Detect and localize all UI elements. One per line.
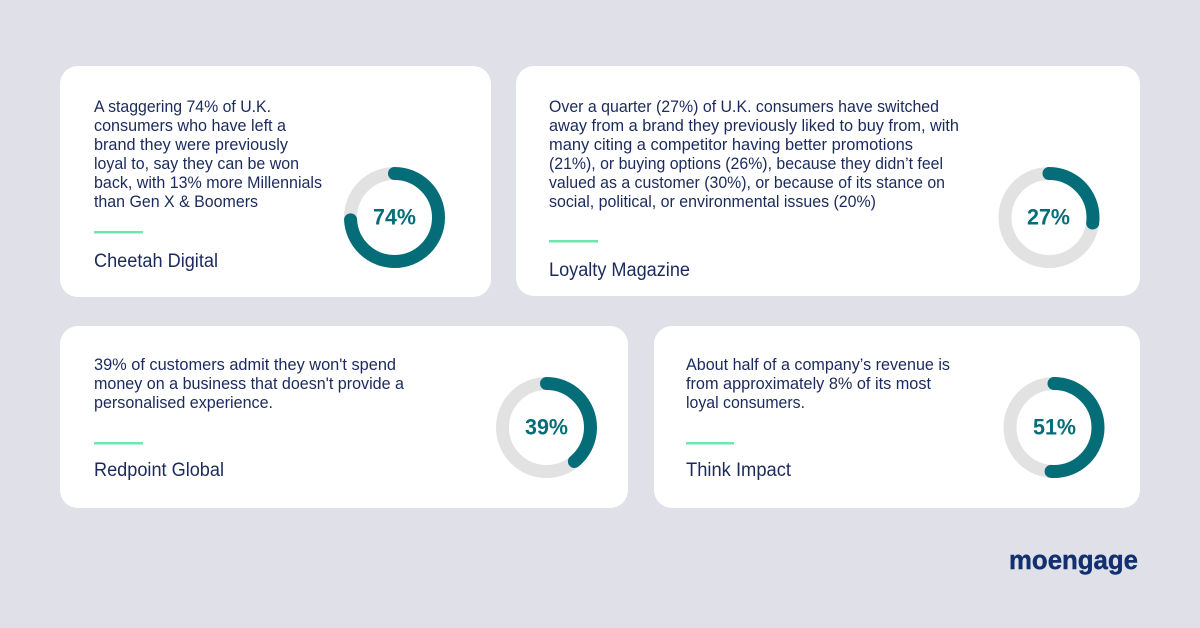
source: Redpoint Global: Redpoint Global: [94, 460, 224, 481]
source: Loyalty Magazine: Loyalty Magazine: [549, 260, 690, 281]
panel: Redpoint Global: [60, 326, 628, 508]
text block: Loyalty Magazine statistic: Over a quarter (27%) of U.K. consumers have switched: [549, 98, 939, 116]
text block: Cheetah Digital statistic: brand they were previously: [94, 136, 289, 154]
text block: Think Impact statistic: About half of a company’s revenue is: [686, 356, 950, 374]
donut chart: 74%: 74%: [373, 204, 416, 230]
donut chart: 27%: 27%: [1027, 204, 1070, 230]
text block: Loyalty Magazine statistic: many citing a competitor having better promotions: [549, 136, 913, 154]
donut chart: 39%: 39%: [525, 414, 568, 440]
text block: Cheetah Digital statistic: than Gen X & Boomers: [94, 193, 258, 211]
text block: Think Impact statistic: [686, 356, 950, 412]
source: Think Impact: Think Impact: [686, 460, 792, 481]
text block: Cheetah Digital statistic: A staggering 74% of U.K.: [94, 98, 271, 116]
source: Cheetah Digital: Cheetah Digital: [94, 251, 218, 272]
text block: Redpoint Global statistic: [94, 356, 405, 412]
text block: Loyalty Magazine statistic: (21%), or buying options (26%), because they didn’t feel: [549, 155, 943, 173]
donut chart: 51%: [1010, 384, 1098, 472]
text block: Redpoint Global statistic: money on a business that doesn't provide a: [94, 375, 405, 393]
text block: Loyalty Magazine statistic: [549, 98, 959, 211]
accent line: [549, 240, 598, 242]
text block: Redpoint Global statistic: 39% of customers admit they won't spend: [94, 356, 396, 374]
text block: Loyalty Magazine statistic: valued as a customer (30%), or because of its stance on: [549, 174, 945, 192]
text block: Loyalty Magazine statistic: social, political, or environmental issues (20%): [549, 193, 876, 211]
panel: Think Impact: [654, 326, 1140, 508]
text block: Cheetah Digital statistic: loyal to, say they can be won: [94, 155, 299, 173]
donut chart: 51%: 51%: [1033, 414, 1076, 440]
text block: Cheetah Digital statistic: back, with 13% more Millennials: [94, 174, 322, 192]
donut chart: 74%: [350, 174, 438, 262]
donut chart: 27%: [1005, 174, 1093, 262]
text block: Redpoint Global statistic: personalised experience.: [94, 394, 273, 412]
text block: Cheetah Digital statistic: consumers who have left a: [94, 117, 287, 135]
accent line: [94, 442, 143, 444]
donut chart: 39%: [502, 384, 590, 472]
text block: Think Impact statistic: loyal consumers.: [686, 394, 805, 412]
logo: moengage: moengage: [1009, 545, 1138, 575]
panel: Loyalty Magazine: [516, 66, 1140, 296]
text block: Cheetah Digital statistic: [94, 98, 322, 211]
accent line: [686, 442, 734, 444]
text block: Think Impact statistic: from approximately 8% of its most: [686, 375, 931, 393]
accent line: [94, 231, 143, 234]
panel: Cheetah Digital: [60, 66, 491, 297]
text block: Loyalty Magazine statistic: away from a brand they previously liked to buy from, with: [549, 117, 959, 135]
